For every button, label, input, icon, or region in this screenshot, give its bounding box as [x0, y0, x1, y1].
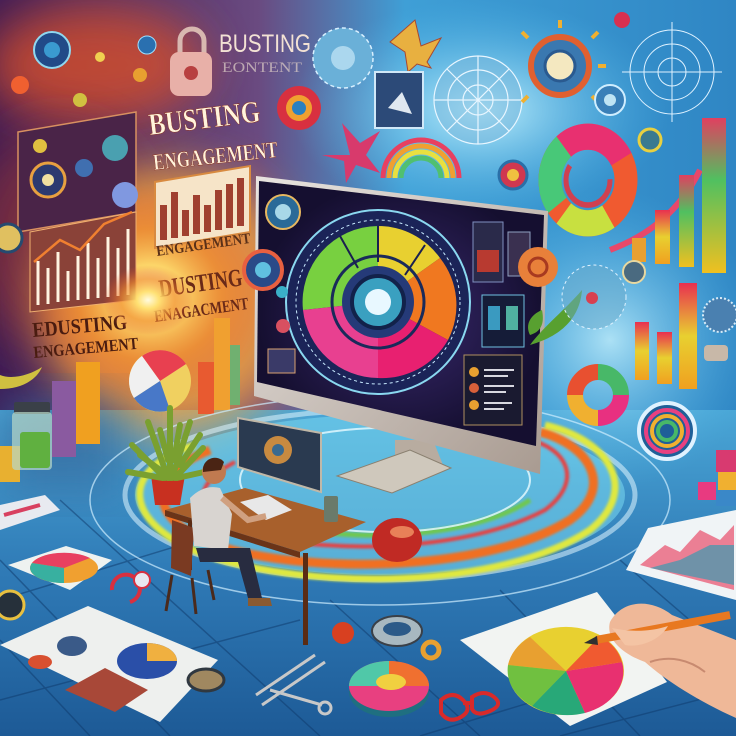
faint heading: BUSTING	[219, 30, 311, 58]
hand holding pencil	[584, 604, 736, 718]
spiral ball and leaves	[518, 247, 582, 345]
heading: lower engagement titles: DUSTING	[157, 265, 244, 303]
panel: line chart with white bars	[30, 212, 136, 312]
faint heading	[219, 30, 311, 76]
screen hoop icon on monitor left	[244, 251, 282, 289]
top icons row	[277, 20, 441, 130]
icon: radar wheel	[434, 56, 522, 144]
chair	[171, 520, 194, 576]
donut chart right middle	[575, 372, 621, 418]
spiral target	[639, 403, 695, 459]
pie ball	[129, 350, 191, 412]
desk	[165, 488, 366, 552]
monitor stand	[395, 440, 445, 476]
icon: rainbow arc	[383, 140, 459, 178]
heading: lower engagement titles	[31, 265, 250, 362]
pen cup	[324, 496, 338, 522]
bar chart top right	[610, 118, 726, 273]
colored bars and pie left	[0, 318, 240, 482]
panel: center bar chart	[155, 166, 252, 260]
plant	[128, 408, 204, 505]
heading: Busting Engagement: ENGAGEMENT	[152, 137, 279, 175]
bar chart right	[635, 283, 697, 389]
icon: gear dial	[522, 12, 630, 115]
color wheel sheet	[460, 592, 667, 726]
heading: lower engagement titles: ENAGACMENT	[153, 294, 250, 326]
keyboard	[240, 495, 292, 520]
faint heading: EONTENT	[222, 60, 302, 76]
red glasses	[441, 693, 498, 720]
left pie sheet	[8, 546, 112, 590]
monitor screen	[257, 181, 544, 446]
right floor chart sheet	[626, 510, 736, 600]
icon: padlock	[170, 29, 212, 96]
bottom left sheet	[0, 606, 218, 722]
cubes	[698, 450, 736, 506]
panel: center bar chart: ENGAGEMENT	[155, 231, 252, 260]
monitor bezel	[254, 176, 548, 474]
small floor gadgets	[0, 572, 150, 619]
heading: lower engagement titles: ENGAGEMENT	[33, 334, 139, 362]
donut chart top right	[550, 137, 626, 223]
left panel: dark chart board	[18, 112, 136, 232]
small icons	[499, 129, 661, 189]
left edge icons	[0, 182, 138, 389]
glow burst	[103, 265, 193, 335]
right small charts	[562, 261, 736, 361]
swirl platform rings	[90, 395, 670, 605]
heading: Busting Engagement	[147, 94, 279, 175]
monitor	[254, 176, 548, 493]
heading: lower engagement titles: EDUSTING	[31, 310, 128, 342]
heading: Busting Engagement: BUSTING	[147, 94, 262, 142]
left edge sheet	[0, 495, 60, 530]
floor tools and objects	[188, 616, 439, 714]
screen widgets	[266, 195, 530, 425]
icon: crosshair globe	[622, 22, 722, 122]
floor donut	[349, 661, 429, 717]
person	[190, 458, 272, 606]
top left icon cluster	[11, 32, 156, 107]
icon: pink flower	[322, 123, 380, 183]
jar	[12, 402, 52, 470]
red ball	[372, 518, 422, 562]
desk with person	[165, 458, 366, 645]
small desktop monitor	[238, 418, 321, 492]
radial dashboard	[286, 210, 470, 394]
